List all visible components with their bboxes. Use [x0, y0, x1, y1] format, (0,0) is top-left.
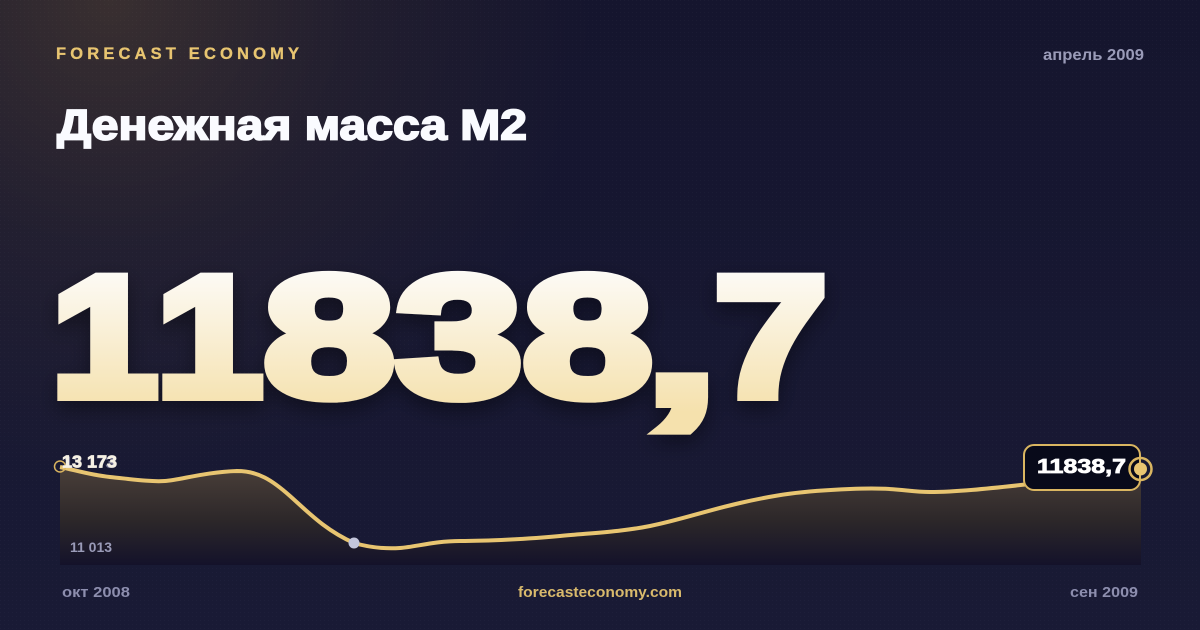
current value callout	[1024, 445, 1140, 490]
brand label: FORECAST ECONOMY	[56, 45, 299, 63]
title: Денежная масса М2	[57, 102, 527, 150]
start marker	[54, 461, 66, 472]
chart line	[60, 467, 1030, 548]
big value: 3	[396, 241, 522, 433]
website: forecasteconomy.com	[518, 585, 682, 601]
chart area fill	[60, 467, 1141, 565]
maximum value label: 13 173	[64, 454, 114, 472]
current value marker	[1130, 458, 1152, 480]
current value callout: 11838,7	[1037, 455, 1126, 478]
minimum value label: 11 013	[70, 540, 113, 555]
big value: 8	[523, 241, 653, 433]
big value: 8	[264, 241, 395, 433]
minimum marker	[348, 538, 360, 548]
date label: апрель 2009	[1043, 47, 1144, 64]
area chart	[54, 445, 1152, 565]
big value: ,	[645, 248, 718, 440]
axis start label: окт 2008	[62, 585, 130, 601]
big value: 1	[51, 241, 158, 433]
big value: 1	[156, 241, 263, 433]
maximum value label: 13 173	[62, 452, 117, 472]
axis end label: сен 2009	[1070, 585, 1138, 601]
big value: 7	[714, 241, 828, 433]
